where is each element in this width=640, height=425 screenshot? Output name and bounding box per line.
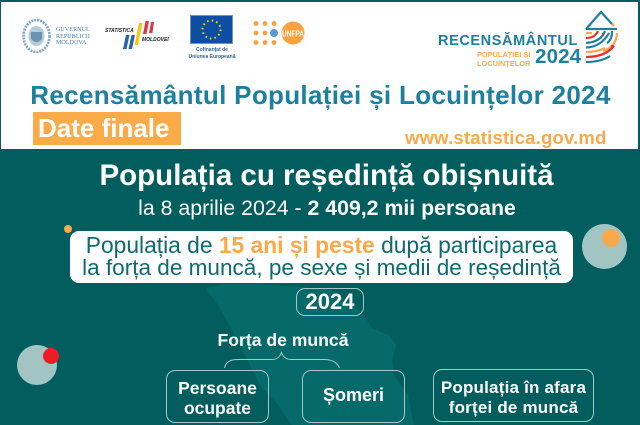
logo text: government [56, 27, 90, 46]
subtitle panel: Populația de 15 ani și peste după participarea [86, 232, 557, 258]
decorative circle: left [17, 345, 57, 385]
icon: government crest [22, 18, 51, 54]
logo caption: co-funded by EU [188, 47, 236, 60]
logo text: government: MOLDOVA [56, 40, 87, 46]
box: outside labour force: forței de muncă [449, 398, 578, 416]
title: Recensământul Populației și Locuințelor 2024 [30, 80, 611, 110]
logo text: government: GUVERNUL [56, 27, 90, 33]
subheading: reference date and total: la 8 aprilie 2024 - 2 409,2 mii persoane [138, 196, 516, 220]
logo: European Union flag [190, 15, 233, 44]
logo word: census: RECENSĂMÂNTUL [438, 33, 578, 49]
logo: Statistica Moldovei: STATISTICA [105, 28, 134, 34]
box: unemployed [302, 370, 405, 423]
logo: Statistica Moldovei: MOLDOVEI [142, 37, 169, 43]
subtitle panel [70, 231, 573, 283]
box: outside labour force: Populația în afara [441, 378, 586, 397]
year badge: 2024 [306, 289, 354, 314]
bracket: labour force [224, 351, 340, 368]
decorative dot: orange [64, 225, 72, 233]
main heading: Populația cu reședință obișnuită [99, 159, 554, 192]
labour force label: Forța de muncă [218, 330, 348, 350]
logo: Statistica Moldovei [105, 21, 169, 49]
icon: house with drop [585, 10, 618, 64]
logo caption: co-funded by EU: Cofinanțat de [196, 47, 228, 53]
subtitle panel: la forța de muncă, pe sexe și medii de reședință [82, 254, 561, 280]
box: employed [166, 370, 269, 423]
box: employed: Persoane [178, 378, 257, 398]
year badge [296, 288, 364, 316]
logo subtitle: POPULAȚIEI ȘI [477, 50, 530, 59]
box: outside labour force [433, 369, 594, 422]
website: www.statistica.gov.md [405, 127, 607, 148]
logo text: government: REPUBLICII [56, 34, 90, 40]
decorative circle: top right [582, 224, 627, 269]
census logo [438, 10, 618, 68]
logo subtitle: LOCUINȚELOR [477, 58, 530, 68]
logo subtitle [477, 50, 530, 68]
header panel [1, 2, 638, 149]
box: unemployed: Șomeri [323, 385, 384, 405]
badge: final data: Date finale [38, 113, 170, 143]
logo: UNFPA [254, 21, 304, 45]
box: employed: ocupate [184, 398, 251, 418]
logo caption: co-funded by EU: Uniunea Europeană [189, 54, 235, 60]
logo year: 2024 [535, 45, 581, 68]
